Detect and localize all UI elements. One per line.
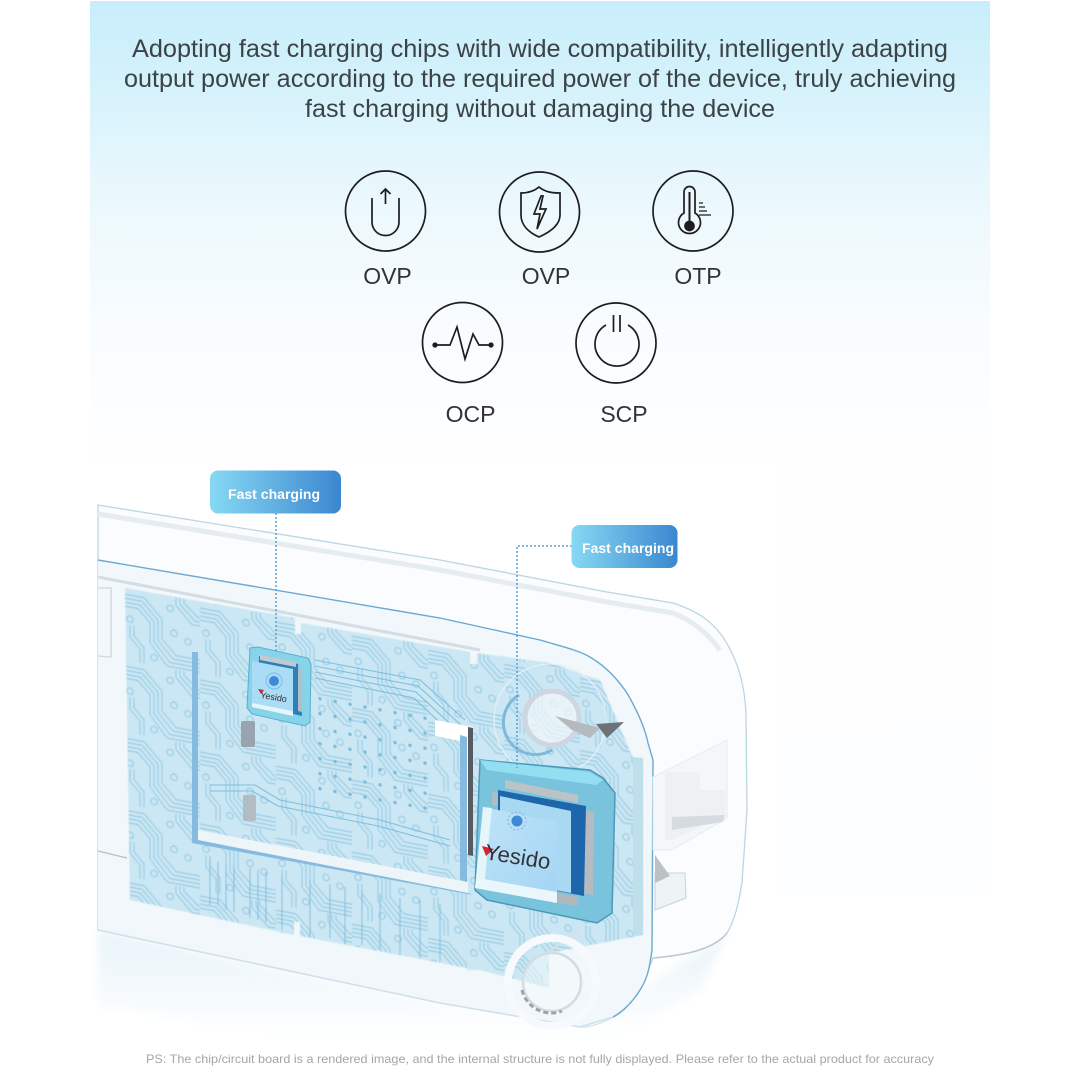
icon labels: OTP: [674, 263, 722, 289]
chip sticker: [475, 807, 557, 903]
icon: OTP thermometer: [653, 171, 733, 251]
ground shadow: [98, 930, 727, 1040]
icon: OCP pulse: [422, 302, 502, 382]
grey inner lip: [98, 577, 480, 650]
small chip: [247, 647, 311, 726]
dotted leader line right: [517, 546, 572, 768]
product photo backdrop: [90, 465, 780, 1080]
mounting hole top: [494, 664, 624, 776]
headline text: output power according to the required power of the device, truly achieving: [124, 65, 956, 93]
background panel: [90, 1, 990, 891]
large chip: [475, 760, 615, 923]
chip logo small: Yesido: [260, 690, 288, 704]
icon labels: [363, 263, 722, 427]
headline text: [124, 35, 956, 123]
front face blue edge: [98, 560, 653, 1017]
transparent charger outer case: [98, 505, 747, 1027]
charger product illustration: [98, 470, 747, 1040]
icon: OVP upload U: [346, 171, 426, 251]
protection icons: [346, 171, 733, 383]
dark edge slot: [435, 720, 473, 882]
icon labels: SCP: [600, 401, 648, 427]
callout: fast charging left: Fast charging: [228, 486, 320, 502]
icon labels: OVP: [363, 263, 412, 289]
small connectors: [241, 721, 256, 821]
board right edge strip: [633, 757, 643, 936]
plug prongs: [653, 740, 727, 910]
callout: fast charging right: Fast charging: [582, 540, 674, 556]
left side window: [98, 588, 111, 657]
icon: OVP shield: [500, 172, 580, 252]
charger front face: [98, 560, 653, 1027]
dotted via field: [310, 690, 435, 815]
icon labels: OVP: [522, 263, 570, 289]
bottom trace bundle: [210, 860, 440, 962]
icon labels: OCP: [446, 401, 495, 427]
chip logo: Yesido: [483, 839, 552, 874]
front face bottom edge: [98, 930, 613, 1027]
outer case highlight: [98, 514, 720, 650]
dotted leader line left: [275, 513, 277, 652]
callout: fast charging right: [572, 525, 678, 568]
icon: SCP power: [576, 303, 656, 383]
lower case curve: [653, 933, 727, 958]
board inner slot frame: [192, 652, 473, 895]
circuit board: [120, 580, 650, 1000]
headline text: fast charging without damaging the device: [305, 95, 775, 123]
mounting hole bottom: [508, 928, 596, 1026]
center board traces: [210, 660, 465, 846]
headline text: Adopting fast charging chips with wide compatibility, intelligently adapting: [132, 35, 948, 63]
callout: fast charging left: [210, 470, 341, 514]
footnote: PS: The chip/circuit board is a rendered image, and the internal structure is not fully displayed. Please refer to the actual product for accuracy: [146, 1052, 934, 1066]
